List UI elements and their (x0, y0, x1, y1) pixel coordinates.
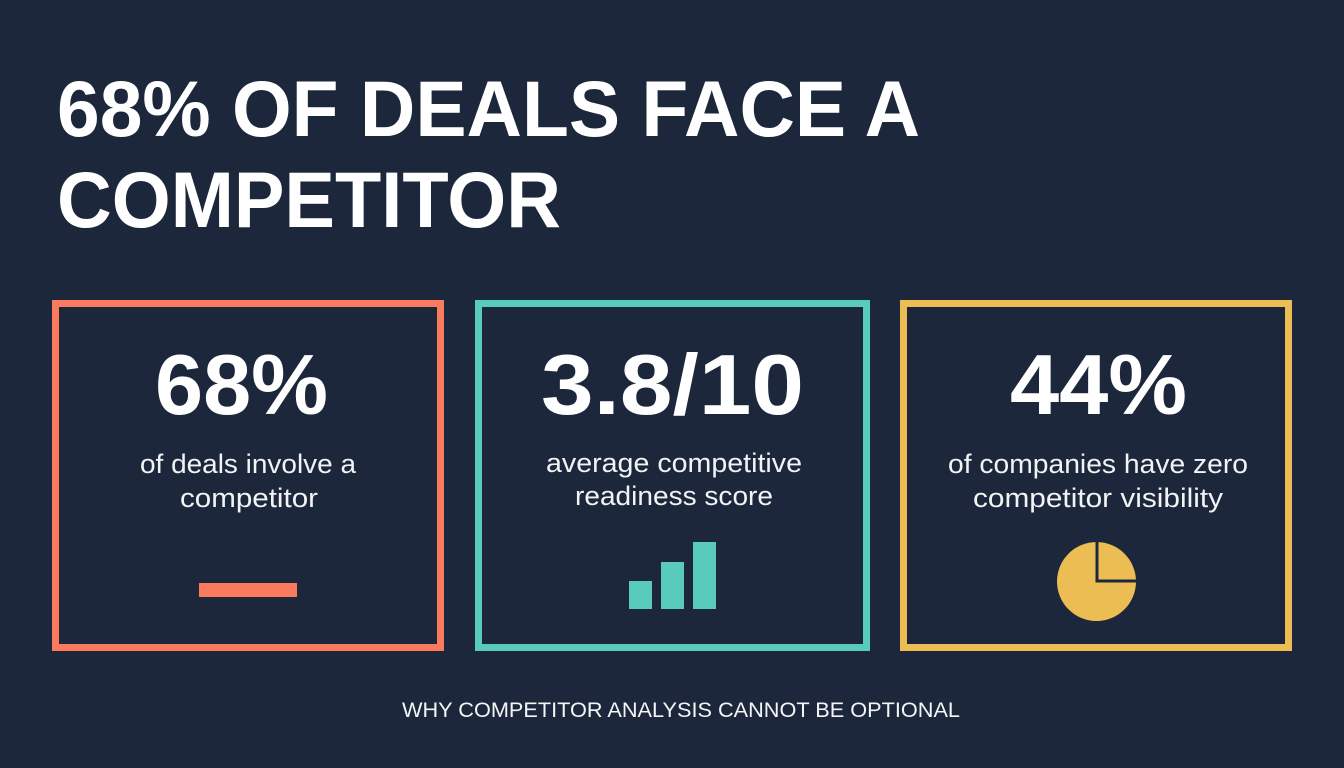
stat: 44%: 44% (1010, 338, 1187, 433)
footer caption: WHY COMPETITOR ANALYSIS CANNOT BE OPTIONAL (402, 698, 960, 722)
description: average competitive readiness score (546, 448, 802, 511)
stat: 68%: 68% (155, 338, 328, 433)
description: of deals involve a competitor: of deals involve a (140, 449, 357, 479)
description: average competitive readiness score: readiness score (575, 481, 773, 511)
stat: 3.8/10: 3.8/10 (541, 338, 804, 433)
panel: 68% of deals (56, 304, 440, 648)
icon: dash (199, 583, 297, 597)
description: of deals involve a competitor: competitor (180, 483, 318, 513)
title (57, 64, 920, 244)
panel: 3.8/10 readiness (478, 304, 866, 648)
icon: pie chart (1057, 541, 1137, 621)
description: of companies have zero competitor visibility: of companies have zero (948, 449, 1248, 479)
description: of deals involve a competitor (140, 449, 357, 513)
title: COMPETITOR (57, 155, 561, 244)
description: of companies have zero competitor visibility: competitor visibility (973, 483, 1224, 513)
panel: 44% of companies (904, 304, 1288, 648)
title: 68% OF DEALS FACE A (57, 64, 920, 153)
icon: bar chart (629, 542, 716, 609)
description: average competitive readiness score: average competitive (546, 448, 802, 478)
description: of companies have zero competitor visibility (948, 449, 1248, 513)
